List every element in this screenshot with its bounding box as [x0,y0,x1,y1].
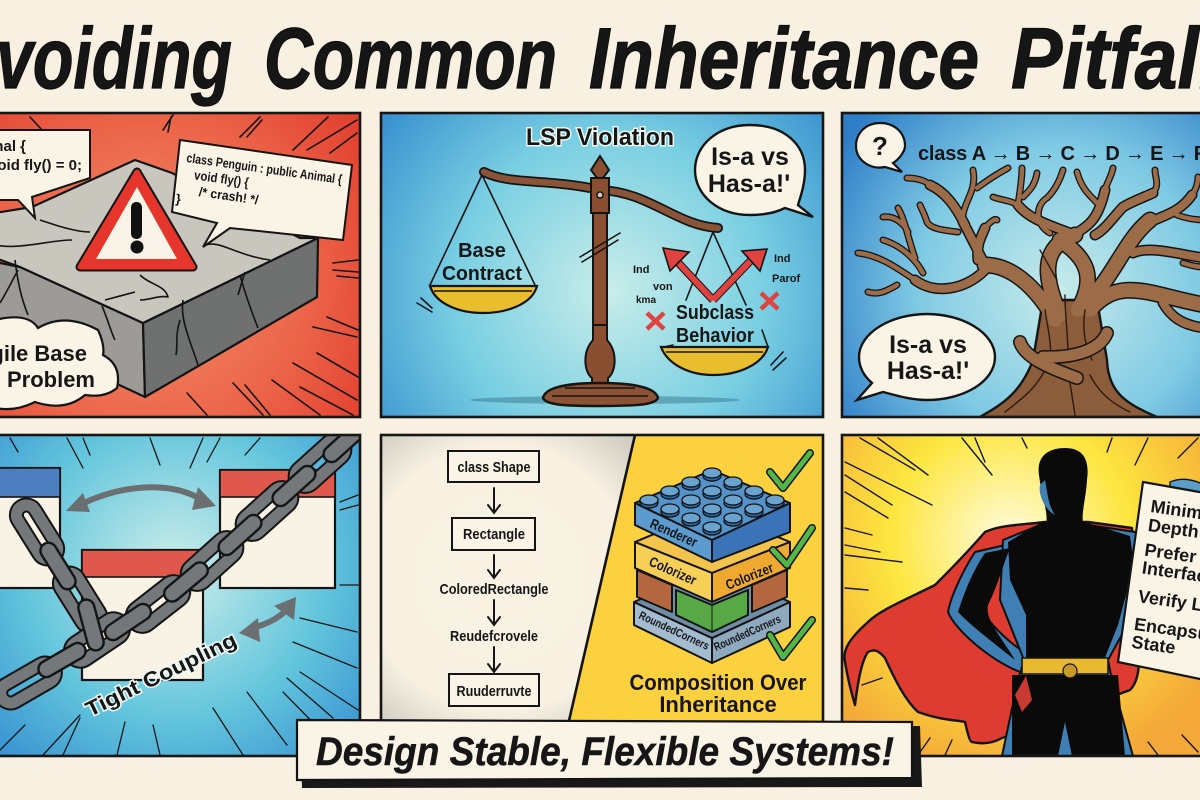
right pan: subclass behavior: Parof [772,273,800,285]
speech bubble: is-a vs has-a [695,125,813,217]
bottom block [633,586,791,664]
right pan: subclass behavior: Ind [774,253,790,265]
checklist paper: State [1130,632,1177,658]
right pan: subclass behavior: kma [636,295,656,306]
green check marks [770,453,812,657]
right pan: subclass behavior: Behavior [676,325,754,347]
double arrow: lower [239,597,296,642]
class box: left [0,468,60,588]
right pan: subclass behavior: Ind [633,264,650,276]
speech bubble: is-a vs has-a [857,314,995,400]
right pan: subclass behavior [633,232,800,375]
hero figure [948,448,1148,756]
class chain: class A → B → C → D → E → F [918,143,1200,165]
panel: superhero checklist [842,435,1200,756]
flowchart: inheritance chain [440,451,548,706]
speed lines [0,438,358,755]
class box: centre [82,550,203,680]
left pan: base contract [417,175,537,313]
speech bubble: is-a vs has-a: Is-a vs [711,143,789,171]
ground shadow [470,396,740,404]
left pan: base contract: Base [458,240,506,262]
panel: tight coupling [0,419,370,756]
yellow block [634,534,791,603]
twisted tree [858,168,1200,417]
double arrow: top [66,487,216,512]
flowchart: inheritance chain: ColoredRectangle [440,581,548,598]
flowchart: inheritance chain: Ruuderruvte [456,683,532,700]
caption: composition over inheritance: Composition Over [630,670,807,695]
title: Inheritance [589,11,979,107]
checklist paper: Depth [1147,515,1200,542]
panel: composition over inheritance: Inheritance [659,692,777,717]
panel: fragile base class [0,113,360,417]
right pan: subclass behavior: von [653,281,673,293]
belt [1022,658,1108,674]
code bubble: penguin: void fly() { [193,167,250,190]
red arrows [676,258,753,303]
checklist paper [1118,479,1200,680]
slogan banner [297,720,922,788]
speech bubble: is-a vs has-a: Has-a!' [887,357,969,385]
title [0,11,1200,107]
title: Common [264,11,557,107]
flowchart: inheritance chain: class Shape [458,459,530,476]
flowchart: inheritance chain: Rectangle [463,526,525,543]
class box: right [220,470,335,588]
code bubble: penguin: } [175,191,182,207]
hero cape [844,522,1139,743]
cloud label [0,317,118,409]
checklist paper: Prefer [1143,540,1198,567]
code bubble: animal [0,130,90,218]
beam [484,172,718,228]
warning triangle [80,172,193,267]
label: tight coupling: Tight Coupling [82,628,240,721]
middle bricks [637,570,787,632]
slogan banner: Design Stable, Flexible Systems! [316,730,894,774]
blue block [635,468,790,562]
question bubble [856,123,905,172]
bottom block: RoundedCorners [637,610,711,653]
concrete block [0,160,318,397]
speed lines [30,115,358,415]
heading: LSP Violation: LSP Violation [526,124,674,151]
panel: LSP violation [381,113,823,417]
flowchart: inheritance chain: Reudefcrovele [450,628,538,645]
question bubble: ? [872,131,888,161]
left pan: base contract: Contract [442,263,522,285]
yellow block: Colorizer [723,559,776,593]
panel: deep inheritance tree [842,113,1200,417]
code bubble: penguin: class Penguin : public Animal { [186,150,343,187]
right pan: subclass behavior: Subclass [676,302,754,324]
bottom block: RoundedCorners [712,613,783,654]
speech bubble: is-a vs has-a: Is-a vs [889,331,967,359]
chains [0,419,370,707]
speech bubble: is-a vs has-a: Has-a!' [708,170,790,198]
speed lines [845,438,1198,755]
lego stack [634,468,790,663]
code bubble: penguin [172,140,352,247]
blue block: Renderer [648,515,700,550]
panel: composition over inheritance [381,435,823,725]
code bubble: penguin: /* crash! */ [198,184,260,207]
balance scale [484,156,718,406]
yellow block: Colorizer [647,553,699,588]
